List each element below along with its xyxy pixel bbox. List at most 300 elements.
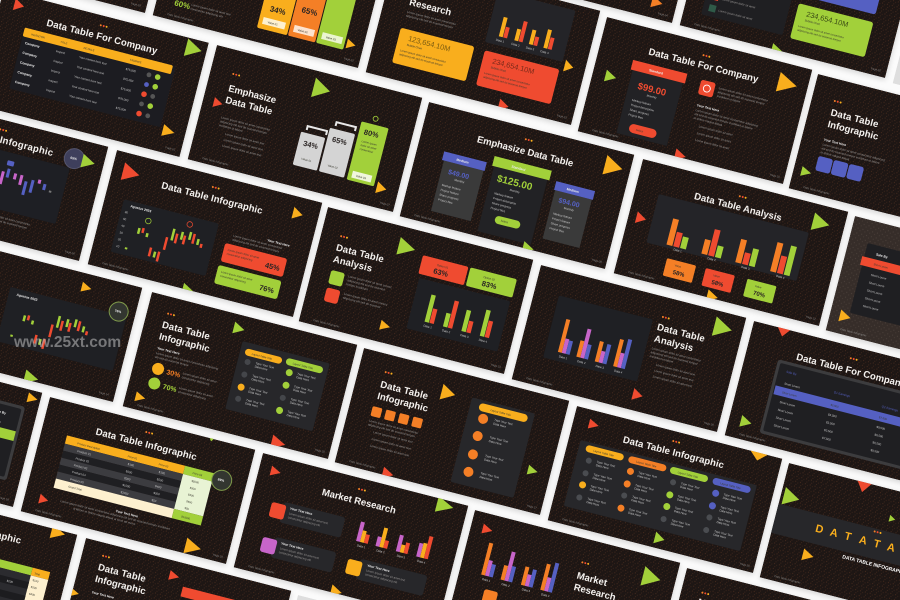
info row red xyxy=(268,499,346,538)
triangle xyxy=(68,587,80,599)
table panel: $3,500 xyxy=(828,412,838,419)
text block: Lorem ipsum dolor sit amet consectetur adipiscing xyxy=(695,108,759,128)
stat 30%: consectetur adipiscing xyxy=(181,375,210,386)
title dots xyxy=(739,195,747,199)
card yellow: Bubble Chart xyxy=(406,43,423,51)
triangle xyxy=(168,570,180,582)
pricing column xyxy=(615,60,687,146)
steps panel: Type Your Text xyxy=(290,397,310,406)
column green: Data Here xyxy=(673,509,688,516)
triangle xyxy=(183,538,203,557)
title: Data Table For Company xyxy=(647,47,760,86)
table panel: $75,000 xyxy=(120,86,132,93)
icons orange xyxy=(370,406,423,429)
table: $1000 xyxy=(122,483,131,489)
info row yellow: Your Text Here xyxy=(367,564,390,573)
card yellow xyxy=(257,0,296,35)
table panel: Company xyxy=(17,70,33,78)
table xyxy=(54,435,214,526)
paragraphs: Lorem ipsum dolor sit amet consec xyxy=(343,292,388,307)
table: $100 xyxy=(158,470,166,476)
table: $5000 xyxy=(191,479,200,485)
pricing column centre xyxy=(475,156,552,245)
table: Product 01 xyxy=(77,449,92,457)
card green xyxy=(790,3,873,57)
text block xyxy=(154,346,220,375)
triangle xyxy=(604,70,618,84)
column green: Type Your Text xyxy=(671,518,691,527)
triangle xyxy=(739,415,753,429)
triangle xyxy=(12,0,24,10)
paragraph: Lorem ipsum dolor sit amet consectetur xyxy=(221,115,271,132)
paragraph xyxy=(645,346,701,389)
table panel: $7,500 xyxy=(879,415,888,421)
column yellow: Data Here xyxy=(592,476,606,483)
title dots xyxy=(102,555,110,559)
column blue: Type Your Text xyxy=(723,492,743,501)
title: Data Table Infographic xyxy=(94,427,198,463)
triangle xyxy=(440,384,457,403)
column blue: Data Here xyxy=(722,496,736,503)
column orange: Data Here xyxy=(628,511,642,518)
column yellow: Type Your Text xyxy=(590,484,610,493)
triangle xyxy=(706,289,719,304)
stat box 58%: 58% xyxy=(672,270,686,279)
triangle xyxy=(134,391,147,404)
triangle xyxy=(674,148,687,163)
table: Price 02 xyxy=(158,462,169,469)
table panel: Company xyxy=(24,41,40,49)
paragraph: incididunt ut labore xyxy=(649,354,674,364)
table: $300 xyxy=(189,486,197,491)
table panel: INVENTOR xyxy=(31,32,45,40)
table panel: DETAILS xyxy=(83,46,95,52)
title xyxy=(94,562,150,597)
pricing column left: Monthly xyxy=(454,178,465,184)
candlestick chart: 40 xyxy=(121,224,125,228)
circle stat 65% xyxy=(64,148,84,170)
slide: data table analysis 63% 83%: Page 13 xyxy=(490,363,502,369)
steps panel xyxy=(564,440,757,551)
pricing column left: Project files xyxy=(438,197,454,205)
text block xyxy=(820,138,887,170)
title xyxy=(158,320,214,355)
paragraphs: tempor incididunt xyxy=(346,282,368,291)
table panel: $3,500 xyxy=(830,403,840,409)
circle stat 76% xyxy=(107,300,130,323)
list panel: Short Lorem xyxy=(868,281,885,289)
table: Product 02 xyxy=(75,456,90,464)
paragraph: incididunt ut labore xyxy=(219,123,244,133)
title dots xyxy=(167,312,175,316)
title: Data Table xyxy=(829,108,880,130)
table panel: $9,500 xyxy=(874,433,884,439)
card yellow: Value 01 xyxy=(267,20,279,27)
slide: stacked blue and green cards: Data Table Infographic xyxy=(694,22,722,33)
table panel: Short Lorem xyxy=(779,400,796,408)
steps panel: Type Your Text xyxy=(249,386,268,395)
text block: Your Text Here xyxy=(115,509,139,519)
list panel xyxy=(848,243,900,351)
title: Data Table Infographic xyxy=(160,180,264,217)
bar chart: Data 4 xyxy=(478,338,488,344)
table: $400 xyxy=(188,492,195,498)
icon red xyxy=(324,287,341,304)
stat box 58% red: Value xyxy=(713,273,721,279)
slide: data table infographic blue icons xyxy=(789,74,900,241)
pricing column centre: Project files xyxy=(490,206,506,213)
triangle xyxy=(745,447,771,463)
slide: chart with 76% circle xyxy=(0,235,142,406)
slide: data table with blue row xyxy=(725,315,900,488)
slide: chart with 76% circle: Page 14 xyxy=(98,390,110,397)
chart panel xyxy=(0,287,127,371)
table panel xyxy=(0,377,25,481)
table panel: TITLE xyxy=(60,40,68,46)
pricing column centre: Monthly xyxy=(509,188,521,194)
slide: market research cards xyxy=(365,0,600,129)
title xyxy=(572,571,620,600)
slide: data table for company, pricing xyxy=(577,17,812,188)
table panel: $3,500 xyxy=(826,420,836,426)
bar chart: Data 1 xyxy=(673,247,683,254)
table: Product 04 xyxy=(72,470,86,477)
slide: data table infographic orange steps xyxy=(334,348,569,519)
triangle xyxy=(653,532,666,546)
bar chart: Data 2 xyxy=(441,328,451,334)
table panel: Company xyxy=(15,80,30,87)
bar chart: Data 4 xyxy=(417,559,426,565)
triangle xyxy=(776,72,799,96)
title dots xyxy=(100,24,108,28)
table: $300 xyxy=(124,476,131,482)
slide: data table analysis 63% 83% xyxy=(299,207,533,374)
steps panel xyxy=(450,397,535,498)
pricing column: Monthly xyxy=(646,93,658,100)
triangle xyxy=(38,494,49,506)
card red: 234,654.10M xyxy=(491,57,535,76)
slide: yellow orange green value cards: Data Table Infographic xyxy=(167,12,195,23)
bar chart: Data 3 xyxy=(460,333,469,339)
triangle xyxy=(712,316,734,340)
stat 30%: Lorem ipsum dolor sit amet xyxy=(182,371,217,384)
triangle xyxy=(80,154,95,168)
info row red: Your Text Here xyxy=(290,507,313,516)
slide: data table infographic 30% 70%: Data Table Infographic xyxy=(137,403,165,414)
slide: infographic with candle chart 65%: Page 06 xyxy=(64,249,76,256)
title dots xyxy=(834,100,842,104)
triangle xyxy=(375,181,388,195)
slide: infographic with candle chart 65% xyxy=(0,119,108,261)
icons blue xyxy=(815,156,864,182)
stat box red: Option 01 xyxy=(437,263,449,270)
pricing column left: Project feature xyxy=(440,188,460,196)
title: Infographic xyxy=(376,391,430,415)
title: Data Table For Company xyxy=(45,18,159,57)
icon green xyxy=(328,270,345,287)
bar chart: Data 1 xyxy=(357,543,366,549)
triangle xyxy=(588,419,600,431)
table panel: Your content here text xyxy=(69,94,97,105)
slide: data table infographic 30% 70%: Page 15 xyxy=(314,448,326,454)
column green: Type Your Text xyxy=(674,506,694,514)
title dots xyxy=(340,235,348,239)
pricing column right: Project files xyxy=(549,226,565,234)
circle stat 89%: 89% xyxy=(217,477,225,483)
pricing column right: Medium xyxy=(566,187,579,194)
card 80%: consectetur xyxy=(359,147,374,154)
info row pink xyxy=(259,534,337,573)
pricing column left: Markup feature xyxy=(441,183,462,192)
card red: Bubble Chart xyxy=(490,65,507,73)
table panel: Q2 Earnings xyxy=(881,405,899,413)
paragraph: Lorem ipsum dolor sit amet text xyxy=(222,144,262,157)
bar chart: Data 3 xyxy=(396,554,406,560)
slide: data table infographic four columns: Page 20 xyxy=(739,562,751,568)
steps panel: Layout Table Title xyxy=(251,352,273,361)
triangle xyxy=(650,0,662,8)
triangle xyxy=(311,78,332,101)
paragraph: adipiscing elit sed do eiusmod tempor xyxy=(650,350,698,366)
title: Data Table Infographic xyxy=(622,435,726,471)
bar chart: Data 2 xyxy=(501,582,511,588)
candlestick chart: 20 xyxy=(117,237,122,242)
table panel xyxy=(9,27,176,127)
triangle xyxy=(781,487,801,508)
candlestick chart: 80 xyxy=(124,210,129,215)
stat box 58%: Value xyxy=(674,263,682,269)
bar chart: Data 2 xyxy=(707,256,716,262)
table: $500 xyxy=(156,477,164,483)
triangle xyxy=(640,566,663,590)
title: Emphasize xyxy=(227,83,277,106)
info row pink: Lorem ipsum dolor sit amet text xyxy=(279,546,320,560)
table: $50 xyxy=(151,498,157,503)
slide: data table analysis purple bars: Page 16 xyxy=(703,421,715,427)
steps panel: Type Your Text xyxy=(255,361,275,370)
icon orange xyxy=(481,589,498,600)
triangle xyxy=(23,369,40,386)
paragraph: adipiscing elit sed do eiusmod tempor xyxy=(406,14,453,30)
slide: emphasize data table: Data Table Infographic xyxy=(202,156,230,167)
table: Product 05 xyxy=(70,477,85,485)
triangle xyxy=(161,124,174,136)
paragraph: Lorem ipsum dolor sit amet text xyxy=(371,437,411,451)
paragraph: adipiscing elit sed do eiusmod tempor xyxy=(368,422,416,438)
steps panel: Type Your Text xyxy=(252,374,271,382)
triangle xyxy=(330,584,343,599)
paragraph: Lorem ipsum dolor sit amet text xyxy=(373,430,413,444)
circle stat 65%: 65% xyxy=(70,156,77,161)
paragraphs xyxy=(342,274,393,311)
triangle xyxy=(435,496,455,516)
triangle xyxy=(212,97,224,109)
slide: partial top-left: Page 09 xyxy=(130,1,142,8)
paragraphs: adipiscing elit sed do eiusmod xyxy=(342,296,381,309)
slide: partial top-left xyxy=(94,0,148,13)
table panel: Inspect xyxy=(51,68,61,75)
table: $200 xyxy=(6,579,14,584)
triangle xyxy=(50,524,67,541)
slide: emphasize data table pricing: Page 08 xyxy=(591,258,603,264)
title: Data Table xyxy=(379,379,429,402)
table: $500 xyxy=(125,469,133,475)
table panel: $7,500 xyxy=(822,436,832,442)
table panel: Short Lorem xyxy=(782,390,798,398)
card red xyxy=(476,50,559,104)
steps panel: Data Here xyxy=(296,375,310,382)
pricing column right: Monthly xyxy=(563,206,575,212)
triangle xyxy=(346,38,356,48)
column orange: Type Your Text xyxy=(638,470,657,479)
card 34% xyxy=(293,125,327,171)
title: Data Table xyxy=(656,322,706,345)
slide: market research icons and bars: Data Table Infographic xyxy=(248,564,276,575)
steps panel: Type Your Text xyxy=(294,384,313,393)
table panel: Sale By xyxy=(786,370,797,376)
text block: Your Text Here xyxy=(696,103,720,113)
steps panel: Layout Table Title xyxy=(292,361,314,370)
text block: elit sed do eiusmod tempor xyxy=(154,355,189,367)
stat box 58% red xyxy=(701,268,735,293)
text block: Your Text Here xyxy=(157,346,180,356)
stat box 45%: Lorem ipsum dolor sit amet xyxy=(227,248,260,260)
title xyxy=(653,322,706,356)
table panel: Your content here text xyxy=(71,84,100,95)
card green: Value 03 xyxy=(325,35,337,42)
column yellow: Type Your Text xyxy=(593,472,613,481)
card 80% xyxy=(347,113,391,186)
column yellow: Type Your Text xyxy=(596,460,616,468)
table: $400 xyxy=(155,484,162,490)
text block: Lorem ipsum dolor sit amet xyxy=(698,124,733,137)
bar chart: Data 2 xyxy=(376,548,386,554)
triangle xyxy=(801,548,815,563)
title: Market Research xyxy=(321,487,397,517)
bar chart: Data 4 xyxy=(540,49,550,55)
table panel: Your content here text xyxy=(74,74,102,85)
cover band xyxy=(771,504,900,585)
table panel: Your content here text xyxy=(79,55,107,66)
bar chart: Data 3 xyxy=(741,265,750,271)
paragraph: Lorem ipsum dolor sit amet consectetur xyxy=(718,86,768,103)
slide: data table infographic blue icons: Data Table Infographic xyxy=(803,185,831,196)
table panel: $75,000 xyxy=(118,96,129,103)
pricing column right: Project feature xyxy=(551,216,571,225)
table panel: Short Lorem xyxy=(773,423,790,431)
title dots xyxy=(873,530,882,534)
card green: adipiscing elit sed do eiusmod tempor xyxy=(797,28,841,43)
table panel: Your content here text xyxy=(76,65,105,76)
triangle xyxy=(121,162,142,184)
card green xyxy=(316,0,356,50)
icon red square xyxy=(698,79,716,98)
column yellow: Data Here xyxy=(589,487,603,495)
column green: Data Here xyxy=(676,497,691,505)
text block: ut labore et dolore magna aliqua ut enim ad minim xyxy=(73,506,136,526)
card yellow: adipiscing elit sed do eiusmod tempor xyxy=(399,52,443,67)
title dots xyxy=(0,128,7,132)
triangle xyxy=(270,466,282,478)
slide: light grey partial bottom xyxy=(269,595,503,600)
stat box red xyxy=(418,255,469,285)
text block: consectetur adipiscing elit xyxy=(190,7,223,19)
card yellow: 123,654.10M xyxy=(407,34,451,53)
slide: cover data table: Data Table Infographic xyxy=(774,574,802,585)
pricing column centre: Standard xyxy=(511,165,526,172)
table panel: Company xyxy=(20,60,35,68)
chart panel: Data 3 xyxy=(595,364,605,370)
slide: data table for company, yellow header xyxy=(0,0,209,157)
triangle xyxy=(27,392,39,405)
text block: Lorem ipsum dolor sit amet consectetur adipiscing xyxy=(155,351,219,371)
column blue: Data Here xyxy=(716,520,730,527)
triangle xyxy=(184,38,202,56)
paragraph: incididunt ut labore xyxy=(716,94,741,104)
table: $50 xyxy=(184,506,190,511)
card yellow xyxy=(392,28,474,81)
candlestick chart: 10 xyxy=(116,244,120,249)
pricing column left: $49.00 xyxy=(447,169,470,181)
column green: Type Your Text xyxy=(677,494,697,503)
candlestick chart: 60 xyxy=(123,217,127,222)
slide: data table infographic with table: Data Table Infographic xyxy=(35,508,63,519)
column yellow: Type Your Text xyxy=(587,497,606,505)
title: Market xyxy=(575,571,609,589)
paragraphs: adipiscing elit sed do eiusmod xyxy=(347,278,386,292)
paragraph: Lorem ipsum dolor sit amet text xyxy=(652,374,693,388)
chart panel: Data 4 xyxy=(614,369,623,375)
candlestick chart xyxy=(111,199,219,276)
pricing column right: Share progress xyxy=(550,221,571,230)
bar chart xyxy=(665,215,797,281)
card 34%: Value 01 xyxy=(301,157,312,163)
slide: chart with candle data: Data Table Infographic xyxy=(102,261,130,272)
stat box 76% xyxy=(214,265,282,299)
table panel: $9,500 xyxy=(872,440,882,447)
list panel xyxy=(702,0,792,34)
table panel: Inspect xyxy=(48,78,58,84)
paragraph: Lorem ipsum dolor sit amet text xyxy=(223,138,263,152)
table panel: $75,000 xyxy=(115,106,127,112)
steps panel xyxy=(225,341,330,431)
stat box 76%: 76% xyxy=(258,283,275,295)
column green xyxy=(657,466,709,532)
card 80%: 80% xyxy=(363,127,380,140)
text block xyxy=(688,103,760,156)
bar chart: Data 4 xyxy=(776,274,785,280)
text block: Lorem ipsum dolor sit amet xyxy=(696,131,731,144)
triangle xyxy=(631,388,644,402)
card 34%: 34% xyxy=(302,139,319,151)
text block: adipiscing elit sed do eiusmod tempor xyxy=(232,238,280,253)
text block: Lorem ipsum dolor sit amet text xyxy=(191,3,231,17)
paragraph xyxy=(214,115,271,158)
paragraph: Lorem ipsum dolor sit amet text xyxy=(225,132,265,146)
pricing column: Markup feature xyxy=(632,98,652,107)
text block: et dolore magna aliqua xyxy=(693,116,723,127)
text: Your Text Here xyxy=(91,590,115,600)
table panel: $75,000 xyxy=(123,77,134,83)
table: $10000 xyxy=(181,514,191,521)
slide: stacked blue and green cards: Page 05 xyxy=(870,66,882,73)
pricing column: Standard xyxy=(649,68,663,76)
triangle xyxy=(635,211,648,225)
paragraph: adipiscing elit sed do eiusmod tempor xyxy=(220,119,268,135)
triangle xyxy=(811,212,832,234)
column orange xyxy=(615,456,667,521)
title xyxy=(376,379,433,415)
